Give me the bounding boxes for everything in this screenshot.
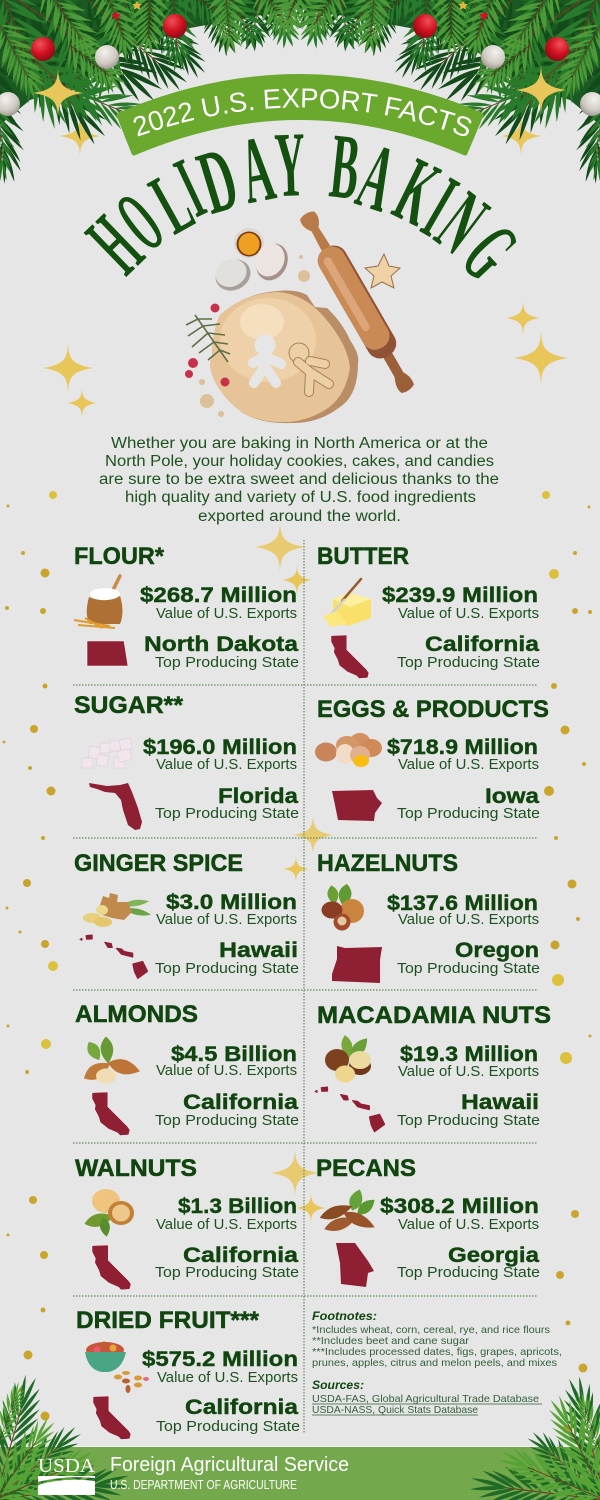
export value: $268.7 Million [140,584,297,607]
top state: Hawaii [219,939,298,962]
footnotes: Footnotes: [312,1311,377,1323]
title: holiday baking [68,113,537,296]
panel: flour: Top Producing State [155,655,299,671]
icon: ginger [83,893,152,927]
top state: California [183,1091,298,1114]
panel: pecans [316,1155,540,1287]
export value: $196.0 Million [143,736,297,759]
panel: dried fruit [76,1307,300,1440]
star cookie [365,254,400,288]
state map: california [92,1245,131,1290]
panel: ginger spice [74,850,299,979]
footer agency name: Foreign Agricultural Service [110,1454,349,1476]
sources [312,1380,542,1416]
heading: eggs and products: EGGS & PRODUCTS [317,696,549,723]
panel: hazelnuts: Top Producing State [397,961,540,977]
panel: macadamia nuts: Value of U.S. Exports [398,1064,539,1080]
footnotes: *Includes wheat, corn, cereal, rye, and rice flours [312,1324,550,1336]
state map: california [331,635,369,679]
title: holiday baking: N [419,172,505,273]
panel: macadamia nuts: Top Producing State [397,1113,540,1129]
panel: walnuts: Value of U.S. Exports [156,1217,297,1233]
dough [210,290,358,423]
heading: ginger spice: GINGER SPICE [74,850,243,877]
title: holiday baking: I [162,140,217,235]
export value: $575.2 Million [142,1348,298,1371]
top state: Hawaii [461,1091,539,1114]
state map: florida [89,783,142,830]
sources: USDA-FAS, Global Agricultural Trade Database [312,1393,539,1405]
export value: $19.3 Million [400,1043,538,1066]
panel: walnuts: Top Producing State [155,1265,299,1281]
berries and crumbs [185,304,230,386]
title: holiday baking: A [347,123,408,232]
panel: sugar [74,692,299,830]
panel: pecans: Value of U.S. Exports [398,1217,539,1233]
top state: Iowa [485,785,539,808]
footnotes [312,1311,562,1369]
heading: butter: BUTTER [317,543,409,570]
title: holiday baking: I [407,158,473,256]
heading: hazelnuts: HAZELNUTS [317,850,458,877]
rolling pin [293,206,421,398]
title: holiday baking: B [326,114,364,219]
icon: macadamia nuts [325,1034,372,1082]
state map: california [92,1092,130,1136]
sources: Sources: [312,1380,364,1392]
panel: almonds: Value of U.S. Exports [156,1063,297,1079]
icon: hazelnuts [322,883,364,930]
panel: ginger spice: Top Producing State [155,961,299,977]
heading: macadamia nuts: MACADAMIA NUTS [317,1002,551,1029]
state map: iowa [332,790,382,821]
panel: dried fruit: Top Producing State [156,1419,300,1435]
title: holiday baking: O [99,175,181,269]
heading: flour: FLOUR* [74,543,164,570]
eggs [234,228,264,258]
panel: flour [74,543,299,671]
panel: pecans: Top Producing State [397,1265,540,1281]
gingerbread cutouts [253,334,329,392]
panel: flour: Value of U.S. Exports [156,606,297,622]
export value: $3.0 Million [166,891,297,914]
panel: almonds: Top Producing State [155,1113,299,1129]
top state: California [183,1244,298,1267]
footnotes: prunes, apples, citrus and melon peels, and mixes [312,1357,557,1369]
gold sparkle stars [43,116,568,1223]
sources: USDA-NASS, Quick Stats Database [312,1404,478,1416]
icon: dried fruit bowl [85,1342,149,1393]
icon: pecans [318,1187,378,1235]
gold glitter dots [2,491,592,1434]
panel: dried fruit: Value of U.S. Exports [157,1370,298,1386]
icon: sugar cubes [82,738,132,768]
state map: north dakota [87,641,128,666]
icon: almonds [80,1036,142,1085]
title: holiday baking: G [444,207,537,296]
fir sprig [186,315,230,362]
icon: butter [323,579,371,627]
state map: california [93,1396,131,1440]
export value: $1.3 Billion [178,1195,297,1218]
footnotes: ***Includes processed dates, figs, grapes, apricots, [312,1346,562,1358]
panel: sugar: Value of U.S. Exports [156,757,297,773]
heading: pecans: PECANS [316,1155,416,1182]
panel: butter: Top Producing State [397,655,540,671]
footer bar [0,1446,600,1500]
icon: eggs [315,733,382,767]
export value: $308.2 Million [380,1195,539,1218]
pine branch bottom left [0,1368,133,1500]
title: holiday baking: D [187,127,248,234]
illustration: dough, eggs and rolling pin [185,206,421,423]
export value: $718.9 Million [387,736,538,759]
panel: eggs and products [315,696,549,822]
dotted grid dividers [73,540,537,1433]
top state: Oregon [455,939,539,962]
pine garland top right with baubles [262,0,600,188]
panel: hazelnuts [317,850,540,983]
export value: $137.6 Million [387,892,538,915]
footnotes: **Includes beet and cane sugar [312,1335,470,1347]
panel: macadamia nuts [315,1002,551,1132]
panel: walnuts [75,1155,299,1290]
panel: butter [317,543,540,679]
icon: walnuts [83,1189,134,1237]
intro paragraph: are sure to be extra sweet and delicious thanks to the [99,471,499,488]
panel: almonds [75,1001,299,1136]
intro paragraph [99,435,499,525]
state map: hawaii [80,935,148,979]
panel: sugar: Top Producing State [155,806,299,822]
heading: dried fruit: DRIED FRUIT*** [76,1307,259,1334]
title: holiday baking: Y [273,113,307,217]
panel: ginger spice: Value of U.S. Exports [156,912,297,928]
top state: California [185,1396,298,1419]
top state: North Dakota [144,633,298,656]
heading: sugar: SUGAR** [74,692,183,719]
panel: butter: Value of U.S. Exports [398,606,539,622]
top state: Florida [218,785,298,808]
state map: oregon [332,946,382,983]
panel: hazelnuts: Value of U.S. Exports [398,912,539,928]
intro paragraph: exported around the world. [198,508,401,525]
title: holiday baking: K [380,137,454,246]
top state: Georgia [448,1244,539,1267]
export value: $4.5 Billion [171,1043,297,1066]
state map: hawaii [315,1087,385,1132]
pine branch bottom right [467,1371,600,1500]
pine garland top left with baubles [0,0,338,188]
top state: California [425,633,539,656]
heading: walnuts: WALNUTS [75,1155,197,1182]
intro paragraph: North Pole, your holiday cookies, cakes, and candies [105,453,494,470]
heading: almonds: ALMONDS [75,1001,198,1028]
panel: eggs and products: Top Producing State [397,806,540,822]
panel: eggs and products: Value of U.S. Exports [398,757,539,773]
title: holiday baking: L [136,154,208,253]
title: holiday baking: A [232,115,282,224]
intro paragraph: Whether you are baking in North America or at the [111,435,488,452]
intro paragraph: high quality and variety of U.S. food ingredients [125,489,476,506]
sparkles over garland [33,65,566,118]
footer department name: U.S. DEPARTMENT OF AGRICULTURE [110,1477,297,1492]
title: holiday baking: H [68,198,162,293]
banner: 2022 U.S. export facts: 2022 U.S. EXPORT FACTS [134,88,472,136]
usda logo: USDA [38,1455,96,1477]
usda logo [38,1455,96,1495]
icon: flour sack [74,576,122,628]
export value: $239.9 Million [382,584,538,607]
state map: georgia [336,1243,374,1287]
